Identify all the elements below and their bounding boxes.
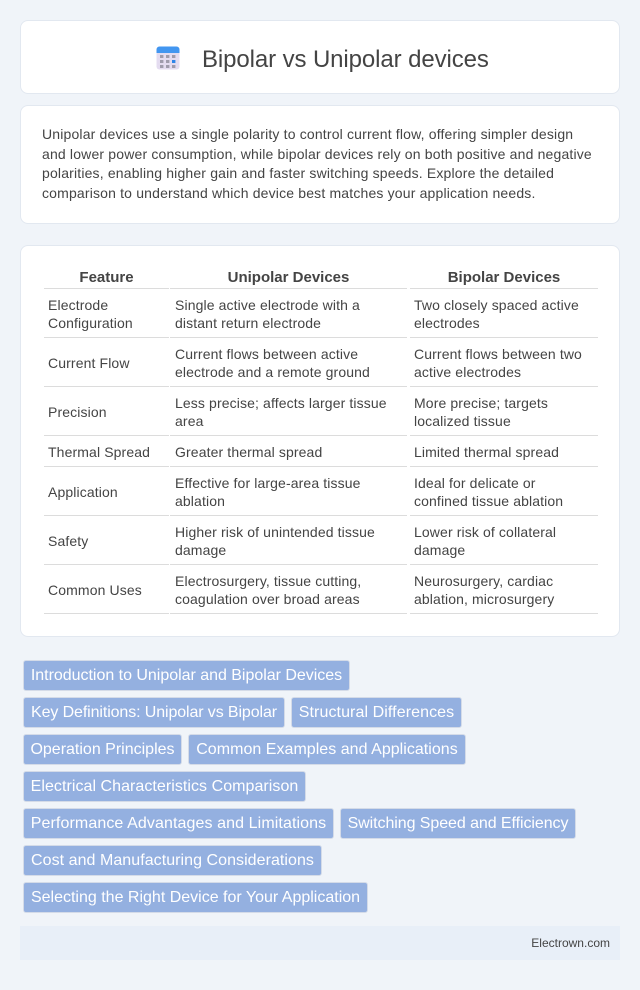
- row: common uses: Electrosurgery, tissue cutting,: [175, 573, 361, 589]
- row: application: ablation: [175, 493, 225, 509]
- row: thermal spread: [48, 444, 559, 460]
- link chip: common examples: [188, 734, 466, 765]
- text block: introduction: [42, 126, 592, 201]
- table header: unipolar devices: Unipolar Devices: [228, 269, 349, 286]
- row: electrode configuration: Configuration: [48, 315, 133, 331]
- row: electrode configuration: [48, 297, 579, 331]
- panel: comparison table: [20, 245, 620, 637]
- row: electrode configuration: distant return electrode: [175, 315, 321, 331]
- row: precision: Precision: [48, 404, 107, 420]
- row: current flow: Current Flow: [48, 355, 130, 371]
- link chip: operation principles: [23, 734, 182, 765]
- row: application: Effective for large-area tissue: [175, 475, 361, 491]
- row: common uses: [48, 573, 554, 607]
- row: current flow: active electrodes: [414, 364, 521, 380]
- table header: feature: Feature: [79, 269, 134, 286]
- link chip: performance advantages: Performance Advantages and Limitations: [31, 815, 326, 832]
- row: safety: Safety: [48, 533, 88, 549]
- link chip: selecting the right device: Selecting the Right Device for Your Application: [31, 889, 360, 906]
- row: electrode configuration: Electrode: [48, 297, 108, 313]
- link chip: electrical characteristics: [23, 771, 306, 802]
- title: Bipolar vs Unipolar devices: [202, 46, 489, 73]
- link chip: structural differences: Structural Differences: [299, 704, 454, 721]
- row: safety: Higher risk of unintended tissue: [175, 524, 375, 540]
- link chip: key definitions: [23, 697, 285, 728]
- link chip: cost and manufacturing: Cost and Manufacturing Considerations: [31, 852, 314, 869]
- footer: [20, 926, 620, 960]
- row: safety: damage: [175, 542, 226, 558]
- link chip: electrical characteristics: Electrical Characteristics Comparison: [31, 778, 298, 795]
- link chip: introduction: Introduction to Unipolar and Bipolar Devices: [31, 667, 342, 684]
- panel: header: [20, 20, 620, 94]
- row: thermal spread: Greater thermal spread: [175, 444, 322, 460]
- row: application: [48, 475, 563, 509]
- text block: introduction: comparison to understand which device best matches your application needs.: [42, 185, 536, 201]
- link chip: key definitions: Key Definitions: Unipolar vs Bipolar: [31, 704, 277, 721]
- row: electrode configuration: electrodes: [414, 315, 480, 331]
- link chip: selecting the right device: [23, 882, 368, 913]
- row: application: confined tissue ablation: [414, 493, 563, 509]
- link chip: common examples: Common Examples and Applications: [196, 741, 458, 758]
- row: precision: area: [175, 413, 204, 429]
- row: current flow: Current flows between active: [175, 346, 358, 362]
- row: electrode configuration: Two closely spaced active: [414, 297, 579, 313]
- icon: calendar: [156, 46, 180, 70]
- text block: introduction: polarities, enabling higher gain and faster switching speeds. Explore the detailed: [42, 165, 554, 181]
- link chip: introduction: [23, 660, 350, 691]
- row: precision: localized tissue: [414, 413, 511, 429]
- row: precision: Less precise; affects larger tissue: [175, 395, 387, 411]
- row: precision: [48, 395, 548, 429]
- row: current flow: [48, 346, 582, 380]
- row: common uses: ablation, microsurgery: [414, 591, 554, 607]
- row: current flow: electrode and a remote ground: [175, 364, 370, 380]
- link chip: cost and manufacturing: [23, 845, 322, 876]
- row: common uses: Common Uses: [48, 582, 142, 598]
- row: common uses: Neurosurgery, cardiac: [414, 573, 553, 589]
- row: safety: [48, 524, 556, 558]
- row: common uses: coagulation over broad areas: [175, 591, 360, 607]
- row: safety: Lower risk of collateral: [414, 524, 556, 540]
- row: application: Ideal for delicate or: [414, 475, 536, 491]
- panel: introduction: [20, 105, 620, 224]
- row: thermal spread: Thermal Spread: [48, 444, 150, 460]
- link chip: performance advantages: [23, 808, 334, 839]
- link chip: structural differences: [291, 697, 462, 728]
- row: precision: More precise; targets: [414, 395, 548, 411]
- row: application: Application: [48, 484, 118, 500]
- row: safety: damage: [414, 542, 465, 558]
- link chip: switching speed: [340, 808, 576, 839]
- link chip: switching speed: Switching Speed and Efficiency: [348, 815, 568, 832]
- row: thermal spread: Limited thermal spread: [414, 444, 559, 460]
- row: electrode configuration: Single active electrode with a: [175, 297, 360, 313]
- footer text: Electrown.com: [531, 936, 610, 950]
- link chip: operation principles: Operation Principles: [30, 741, 175, 758]
- row: current flow: Current flows between two: [414, 346, 582, 362]
- text block: introduction: and lower power consumption, while bipolar devices rely on both positive and negative: [42, 146, 592, 162]
- table header: bipolar devices: Bipolar Devices: [448, 269, 560, 286]
- text block: introduction: Unipolar devices use a single polarity to control current flow, offering simpler design: [42, 126, 573, 142]
